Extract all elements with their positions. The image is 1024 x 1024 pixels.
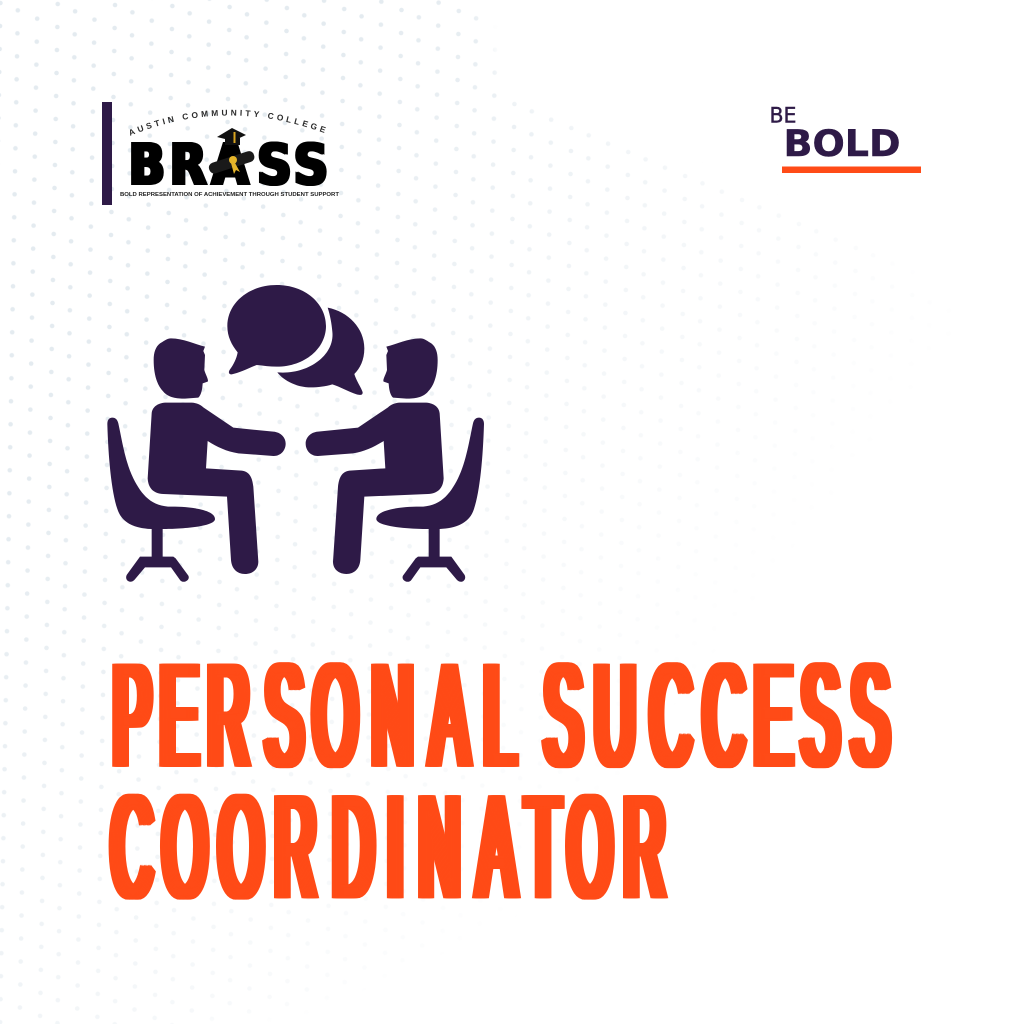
title <box>111 635 889 929</box>
left person and chair <box>107 338 286 582</box>
logo wordmark: BRASS <box>129 133 328 198</box>
speech bubble back <box>277 308 364 395</box>
icon: two people seated in conversation <box>107 285 484 582</box>
accent bar beside logo <box>102 102 112 205</box>
logo arc text: AUSTIN COMMUNITY COLLEGE <box>130 110 326 136</box>
title line 1: PERSONAL SUCCESS <box>113 635 889 797</box>
logo: Austin Community College BRASS <box>120 110 340 198</box>
right person and chair <box>306 338 484 582</box>
Bold text: BOLD <box>784 122 900 165</box>
speech bubble front <box>227 285 326 374</box>
title line 2: COORDINATOR <box>111 766 665 929</box>
orange underline <box>782 166 921 173</box>
icon: graduation cap and diploma on the A <box>208 128 256 175</box>
Be text: BE <box>770 103 796 128</box>
Be Bold logo <box>770 103 921 173</box>
logo tagline: BOLD REPRESENTATION OF ACHIEVEMENT THROUGH STUDENT SUPPORT <box>120 192 340 198</box>
